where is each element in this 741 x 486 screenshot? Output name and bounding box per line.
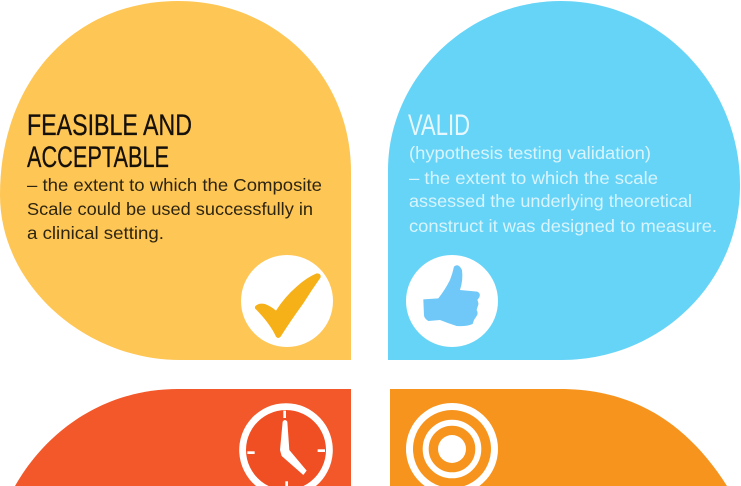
icon: thumbs up <box>406 255 498 347</box>
panel: red lower left <box>15 389 351 486</box>
yellow petal shape <box>0 1 351 360</box>
description: valid: assessed the underlying theoretical <box>409 191 692 211</box>
description: valid: construct it was designed to measure. <box>409 216 717 236</box>
orange petal shape <box>390 389 727 486</box>
description: feasible and acceptable: a clinical setting. <box>27 223 164 243</box>
icon: target <box>406 403 498 486</box>
heading: valid: VALID <box>408 109 470 142</box>
description: valid: (hypothesis testing validation) <box>409 143 651 163</box>
icon: check mark <box>241 255 333 347</box>
description: valid <box>409 143 717 236</box>
description: feasible and acceptable <box>27 175 322 243</box>
blue petal shape <box>388 1 740 360</box>
red petal shape <box>15 389 351 486</box>
icon: clock <box>239 403 333 486</box>
heading: feasible and acceptable: ACCEPTABLE <box>27 141 169 174</box>
panel: orange lower right <box>390 389 727 486</box>
heading: feasible and acceptable <box>27 109 192 174</box>
panel: valid <box>388 1 740 360</box>
description: feasible and acceptable: Scale could be used successfully in <box>27 199 313 219</box>
panel: feasible and acceptable <box>0 1 351 360</box>
description: feasible and acceptable: – the extent to which the Composite <box>27 175 322 195</box>
heading: feasible and acceptable: FEASIBLE AND <box>27 109 192 142</box>
description: valid: – the extent to which the scale <box>409 168 658 188</box>
